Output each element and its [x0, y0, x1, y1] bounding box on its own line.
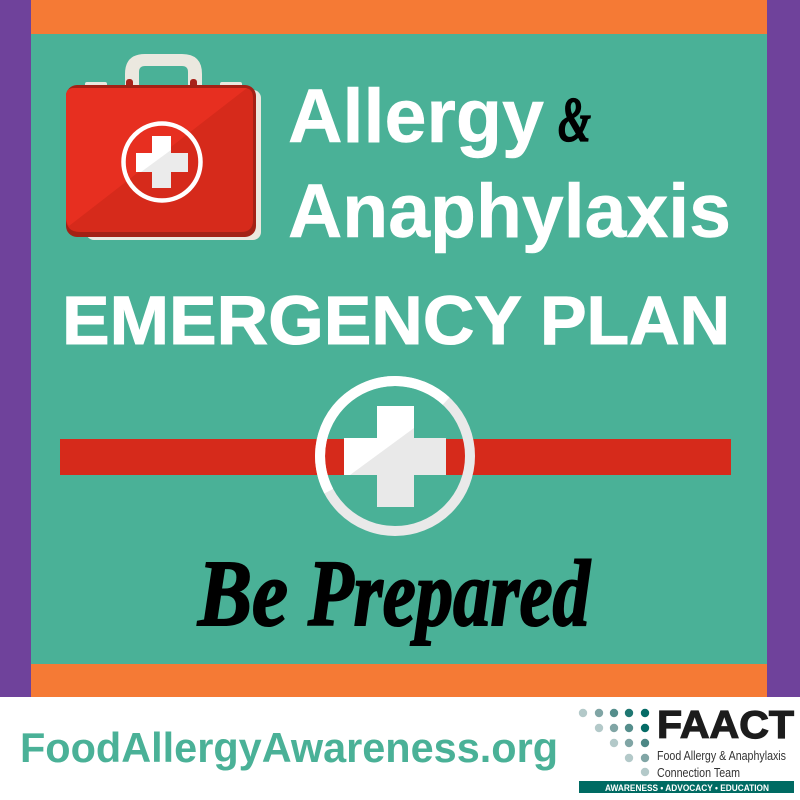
heading: Allergy: Allergy [288, 74, 544, 159]
ring [320, 381, 470, 531]
heading: Emergency Plan: EMERGENCY [62, 282, 522, 359]
website link: FoodAllergyAwareness.org [20, 724, 558, 771]
logo name line two: Connection Team [657, 766, 740, 780]
tagline: Be Prepared [197, 542, 592, 646]
cross [344, 406, 446, 507]
heading: Anaphylaxis: Anaphylaxis [288, 169, 731, 254]
logo: FAACT [579, 704, 794, 793]
heading: ampersand: & [558, 84, 591, 155]
logo strapline bar [579, 781, 794, 793]
icon: first aid kit [66, 54, 261, 240]
kit emblem [124, 124, 200, 200]
logo dot pattern [579, 709, 649, 776]
icon: medical cross in ring [320, 381, 470, 531]
logo strapline bar: AWARENESS • ADVOCACY • EDUCATION [605, 783, 769, 793]
logo wordmark: FAACT [657, 704, 794, 747]
divider: red bar [60, 439, 731, 475]
heading: Emergency Plan [62, 282, 730, 359]
tagline: Be Prepared: Prepared [307, 542, 592, 646]
kit latches and shadow [85, 79, 261, 240]
kit handle [125, 54, 202, 86]
kit body [66, 85, 256, 237]
tagline: Be Prepared: Be [197, 542, 288, 646]
heading: Emergency Plan: PLAN [540, 282, 730, 359]
